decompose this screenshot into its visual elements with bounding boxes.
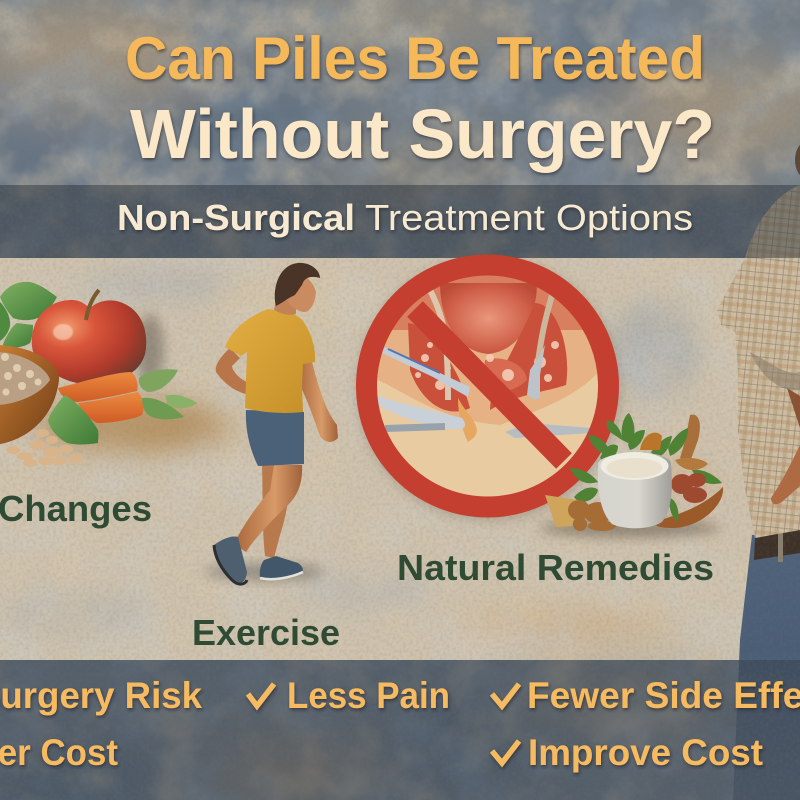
label: Natural Remedies: Natural Remedies: [397, 547, 714, 588]
sign inner scene: [377, 276, 598, 496]
remedies shadow: [540, 519, 720, 537]
benefit: Improve Cost: Improve Cost: [528, 732, 763, 773]
benefits list: [0, 675, 800, 773]
food shadow: [30, 399, 220, 451]
cracker: [545, 495, 578, 527]
illustration: walking man: [205, 263, 338, 584]
hair: [795, 142, 800, 178]
leaves behind apple: [0, 282, 57, 320]
right arm: [297, 360, 338, 442]
illustration: no-surgery sign: [358, 258, 620, 520]
yellow t-shirt: [225, 309, 315, 413]
spoon handle: [680, 415, 700, 462]
subtitle: Non-Surgical: [117, 197, 355, 238]
subtitle: [117, 197, 693, 238]
grains in bowl: [1, 353, 42, 396]
dried fruit: [640, 433, 662, 450]
neck and face: [274, 300, 296, 315]
ground shadow: [205, 564, 325, 580]
apple: [32, 300, 146, 385]
carrots: [58, 372, 138, 402]
left arm on back: [216, 348, 247, 394]
hand: [771, 445, 800, 504]
label: Changes: Changes: [0, 488, 152, 529]
prohibition ring and slash: [366, 265, 608, 507]
plaid shirt: [717, 185, 800, 538]
sign shadow: [358, 258, 620, 520]
basil leaves by carrots: [139, 369, 178, 392]
title: Without Surgery?: [130, 95, 715, 173]
top band: subtitle strip: [0, 185, 800, 258]
front leg: [234, 465, 302, 552]
walnuts in front: [568, 500, 616, 531]
left shoe: [214, 536, 247, 583]
hair: [275, 263, 320, 306]
pile of nuts: [6, 429, 82, 467]
title: Can Piles Be Treated: [125, 25, 705, 92]
right shoe: [260, 556, 303, 579]
walnuts on plate: [671, 473, 707, 503]
leaf under bowl: [48, 395, 98, 444]
title: [125, 25, 715, 173]
illustration: natural remedies: [540, 413, 723, 537]
ceramic bowl: [598, 453, 672, 528]
bottom band: benefits strip: [0, 660, 800, 800]
subtitle: Treatment Options: [365, 197, 693, 238]
back leg: [262, 465, 290, 558]
wooden bowl: [0, 345, 59, 445]
belt: [754, 530, 800, 560]
man holding his lower back: [717, 142, 800, 800]
wooden plate: [653, 487, 723, 528]
label: Exercise: Exercise: [192, 612, 340, 653]
illustration: healthy food: [0, 282, 220, 467]
jeans: [733, 530, 800, 800]
denim shorts: [246, 410, 304, 466]
herbs: [570, 413, 722, 522]
benefit: Less Pain: Less Pain: [287, 675, 450, 716]
